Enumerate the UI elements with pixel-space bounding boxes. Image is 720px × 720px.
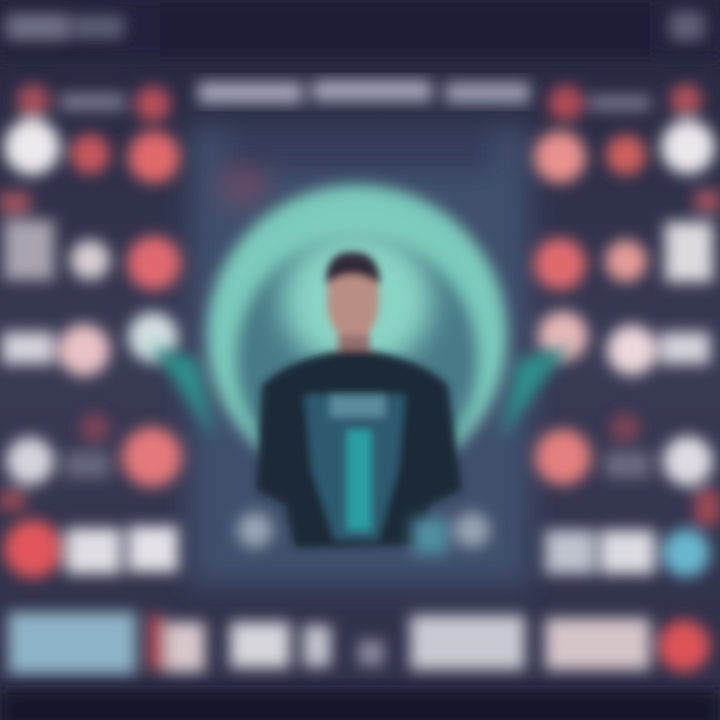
- bottom strip: [8, 612, 710, 674]
- left row 4: [6, 413, 182, 487]
- right row 3: [538, 311, 710, 375]
- left row 5: [0, 490, 178, 578]
- lower centre glow icons: [237, 512, 490, 554]
- right row 5: [545, 490, 720, 577]
- figure: [256, 252, 462, 548]
- left row 1: [4, 84, 180, 183]
- bottom red marker: [148, 615, 164, 670]
- left row 2: [0, 192, 181, 290]
- bottom footer band: [0, 690, 720, 720]
- right column: [534, 84, 720, 577]
- left row 3: [2, 312, 178, 376]
- right row 2: [534, 190, 720, 290]
- top header band: [0, 0, 720, 58]
- central backdrop: [190, 125, 530, 585]
- bottom box left: [8, 612, 136, 674]
- right row 4: [535, 413, 713, 486]
- right row 1: [534, 84, 715, 183]
- title: [198, 80, 530, 104]
- left column: [0, 84, 182, 578]
- central figure ring: [150, 185, 570, 548]
